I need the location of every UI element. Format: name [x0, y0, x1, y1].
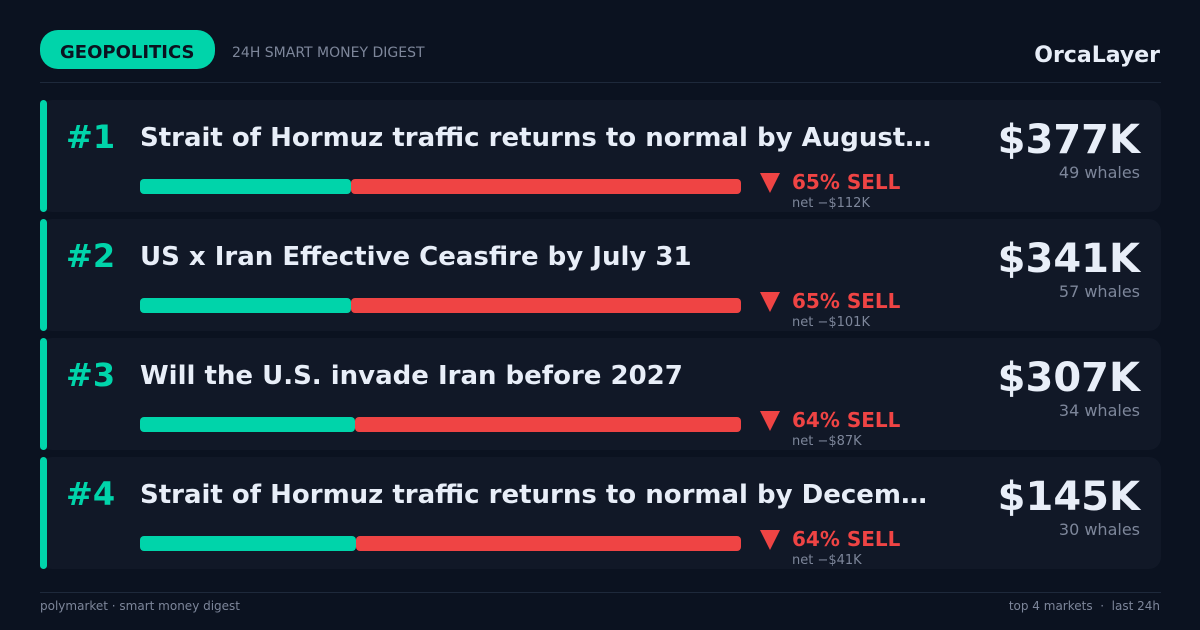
panel: market 4: 30 whales — [1059, 520, 1140, 539]
sentiment bar 1 — [140, 179, 741, 194]
panel: market 4 — [40, 457, 1161, 569]
footer left: polymarket · smart money digest — [40, 599, 240, 613]
panel: market 4: Strait of Hormuz traffic returns to normal by Decem… — [140, 480, 927, 510]
panel: market 4: net −$41K — [792, 553, 862, 568]
panel: market 3: 64% SELL — [792, 408, 901, 432]
icon: down triangle 2 — [760, 292, 780, 312]
panel: market 1: 49 whales — [1059, 163, 1140, 182]
icon: down triangle 3 — [760, 411, 780, 431]
panel: market 3: 34 whales — [1059, 401, 1140, 420]
panel: market 2: US x Iran Effective Ceasfire by July 31 — [140, 242, 692, 272]
panel: market 4: #4 — [66, 475, 115, 513]
header badge: GEOPOLITICS — [40, 30, 215, 69]
panel: market 1: $377K — [998, 117, 1142, 163]
panel: market 4: $145K — [998, 474, 1142, 520]
panel: market 1: net −$112K — [792, 196, 870, 211]
panel: market 3 — [40, 338, 1161, 450]
panel: market 4: 64% SELL — [792, 527, 901, 551]
header badge: GEOPOLITICS: GEOPOLITICS — [60, 42, 195, 63]
sentiment bar 2 — [140, 298, 741, 313]
brand name: OrcaLayer — [1034, 43, 1160, 68]
panel: market 3: net −$87K — [792, 434, 862, 449]
sentiment bar 3 — [140, 417, 741, 432]
panel: market 2: net −$101K — [792, 315, 870, 330]
panel: market 2: 57 whales — [1059, 282, 1140, 301]
footer right: top 4 markets · last 24h — [1009, 599, 1160, 613]
panel: market 3: $307K — [998, 355, 1142, 401]
icon: down triangle 1 — [760, 173, 780, 193]
panel: market 2: $341K — [998, 236, 1142, 282]
panel: market 1: 65% SELL — [792, 170, 901, 194]
panel: market 2: 65% SELL — [792, 289, 901, 313]
panel: market 2: #2 — [66, 237, 115, 275]
icon: down triangle 4 — [760, 530, 780, 550]
panel: market 1: #1 — [66, 118, 115, 156]
sentiment bar 4 — [140, 536, 741, 551]
panel: market 2 — [40, 219, 1161, 331]
panel: market 3: Will the U.S. invade Iran before 2027 — [140, 361, 683, 391]
panel: market 3: #3 — [66, 356, 115, 394]
panel: market 1: Strait of Hormuz traffic returns to normal by August… — [140, 123, 931, 153]
header subtitle: 24H SMART MONEY DIGEST — [232, 45, 425, 61]
panel: market 1 — [40, 100, 1161, 212]
